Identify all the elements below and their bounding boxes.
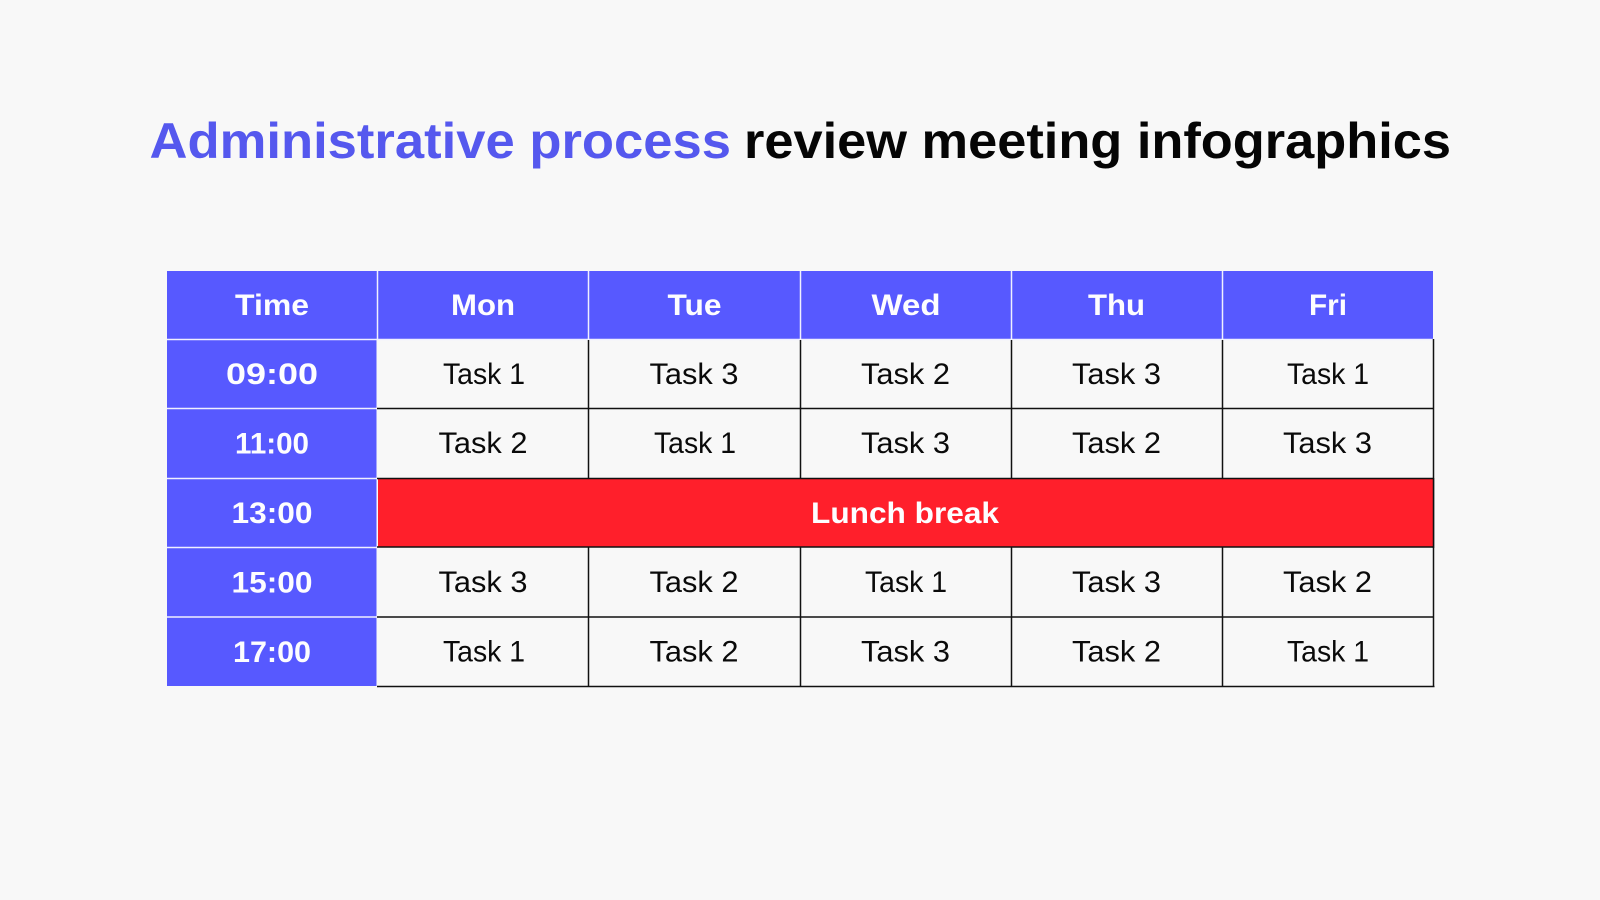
row 15:00: Task 1: [865, 566, 947, 599]
row 17:00: Task 1: [1287, 636, 1369, 668]
row 17:00: Task 2: [1072, 636, 1161, 668]
time column: [167, 340, 1433, 686]
row 09:00: Task 2: [861, 358, 950, 391]
header row: Time: [235, 289, 309, 322]
row 15:00: Task 3: [438, 566, 528, 599]
lunch break band: [377, 478, 1434, 548]
header row: Tue: [668, 289, 722, 322]
row 11:00: Task 1: [654, 427, 736, 460]
task grid lines: [377, 339, 1434, 686]
row 09:00: Task 1: [443, 358, 525, 391]
header row: Wed: [872, 289, 940, 322]
row 17:00: Task 1: [443, 636, 525, 668]
title: Administrative process: [150, 113, 731, 169]
row 09:00: [443, 358, 1369, 391]
lunch break band: Lunch break: [811, 497, 999, 530]
title: review meeting infographics: [744, 113, 1451, 169]
row 17:00: Task 2: [650, 636, 738, 668]
row 15:00: Task 2: [1283, 566, 1372, 599]
header row: Fri: [1309, 289, 1347, 322]
row 11:00: Task 3: [861, 427, 950, 460]
time column: 13:00: [232, 497, 312, 530]
row 15:00: Task 3: [1072, 566, 1161, 599]
row 11:00: Task 2: [438, 427, 528, 460]
row 11:00: Task 2: [1072, 427, 1161, 460]
row 15:00: [438, 566, 1372, 599]
time column: 09:00: [226, 358, 318, 391]
schedule table: [167, 271, 1434, 686]
header row: Mon: [451, 289, 515, 322]
time column: 11:00: [235, 428, 309, 460]
row 09:00: Task 3: [1072, 358, 1161, 391]
row 09:00: Task 3: [650, 358, 738, 391]
row 17:00: [443, 636, 1369, 668]
header row: [167, 271, 1433, 339]
header row: Thu: [1088, 289, 1145, 322]
title: [150, 113, 1451, 169]
row 15:00: Task 2: [650, 566, 738, 599]
row 09:00: Task 1: [1287, 358, 1369, 391]
row 11:00: [438, 427, 1372, 460]
row 17:00: Task 3: [861, 636, 950, 668]
time column: 15:00: [232, 566, 312, 600]
time column: 17:00: [233, 636, 311, 669]
row 11:00: Task 3: [1283, 427, 1372, 460]
